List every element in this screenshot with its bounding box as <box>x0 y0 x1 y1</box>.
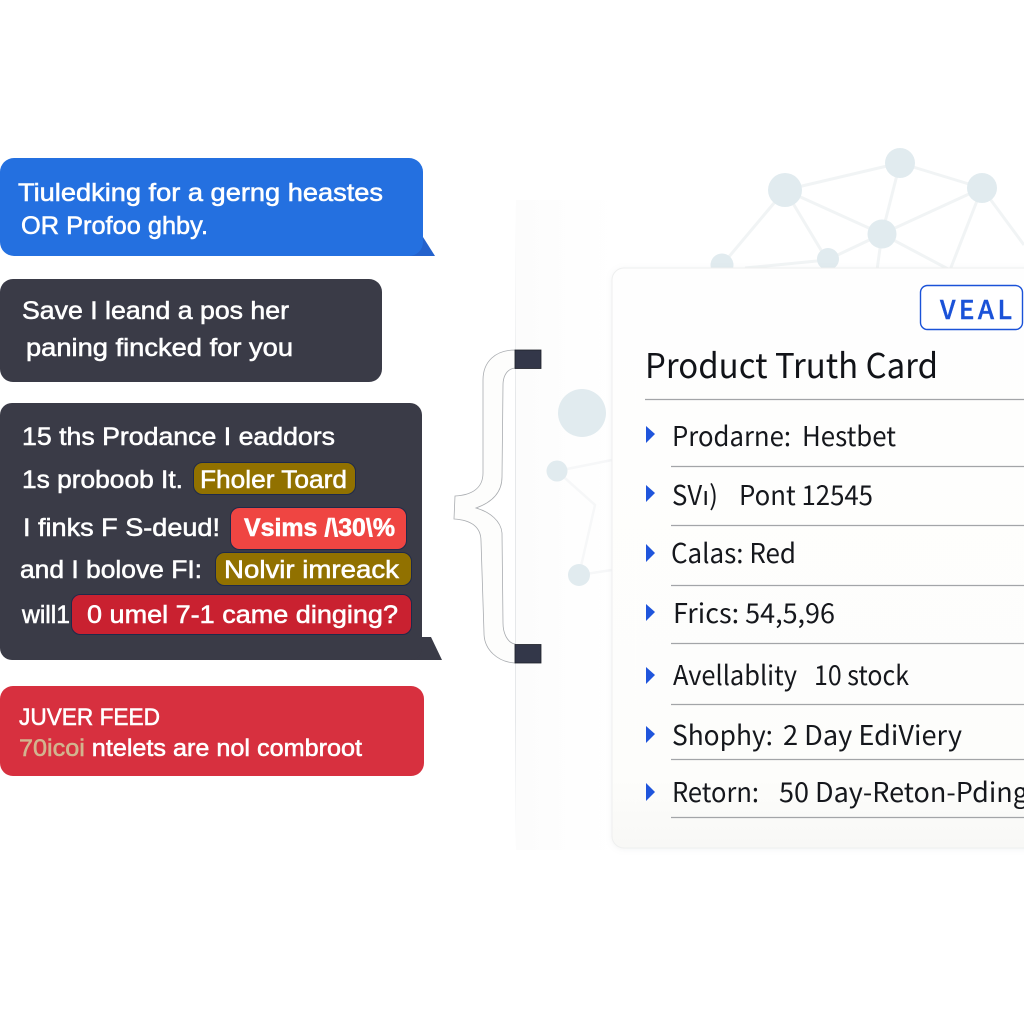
highlight chip: Nolvir imreack: Nolvir imreack <box>224 556 400 584</box>
panel: dark chat bubble <box>0 279 382 382</box>
panel: dark chat bubble with highlights <box>0 403 442 660</box>
row: Retorn: Retorn: <box>672 771 759 810</box>
row: Retorn <box>646 771 1024 818</box>
highlight chip: Vsims <box>230 508 406 550</box>
warning heading: JUVER FEED <box>19 704 160 731</box>
row: Retorn: 50 Day-Reton-Pding <box>779 771 1024 810</box>
badge: VEAL <box>920 286 1022 330</box>
row: Shophy <box>646 714 1024 760</box>
row: SVI <box>646 474 1024 526</box>
bubble text <box>22 297 293 362</box>
row: Frics <box>646 592 1024 644</box>
row: Calas <box>646 532 1024 586</box>
row: SVI: SVı) <box>672 474 718 513</box>
highlight chip: Vsims: Vsims /\30\% <box>244 514 395 542</box>
panel: red warning bubble <box>0 686 424 776</box>
message text: 1s proboob It. <box>22 466 183 494</box>
background panel: right side <box>515 200 616 850</box>
row: Prodarne: Prodarne: <box>672 415 791 454</box>
row: Shophy: 2 Day EdiViery <box>783 714 962 753</box>
badge: VEAL: VEAL <box>939 290 1012 327</box>
message text: will1 <box>21 601 70 629</box>
highlight chip: Fholer Toard: Fholer Toard <box>200 466 347 494</box>
message text: 15 ths Prodance I eaddors <box>22 423 335 451</box>
row: Availability: Avellablity <box>673 654 797 693</box>
bubble text: paning fincked for you <box>26 334 293 362</box>
row: Prodarne <box>646 415 1024 466</box>
bracket connector <box>454 350 541 663</box>
message text: and I bolove FI: <box>20 556 202 584</box>
panel: blue chat bubble <box>0 158 435 256</box>
bubble text: OR Profoo ghby. <box>21 212 208 240</box>
row: Availability: 10 stock <box>814 654 909 693</box>
highlight chip: question <box>72 594 412 634</box>
row: SVI: Pont 12545 <box>739 474 873 513</box>
highlight chip: question: 0 umel 7-1 came dinging? <box>87 601 398 629</box>
row: Shophy: Shophy: <box>672 714 773 753</box>
row: Frics: Frics: 54,5,96 <box>673 592 835 631</box>
row: Availability <box>646 654 1024 704</box>
bubble text: Save I leand a pos her <box>22 297 289 325</box>
network graphic: top nodes <box>546 148 1024 586</box>
row: Prodarne: Hestbet <box>802 415 896 454</box>
row: Calas: Calas: Red <box>671 532 796 571</box>
warning text: 70icoi ntelets are nol combroot <box>19 735 362 762</box>
highlight chip: Nolvir imreack <box>216 552 412 586</box>
message text <box>20 423 335 629</box>
bubble text <box>18 179 383 240</box>
message text: I finks F S-deud! <box>23 514 220 542</box>
panel: product truth card <box>612 268 1024 848</box>
bubble text: Tiuledking for a gerng heastes <box>18 179 383 207</box>
card title: Product Truth Card <box>645 339 938 388</box>
